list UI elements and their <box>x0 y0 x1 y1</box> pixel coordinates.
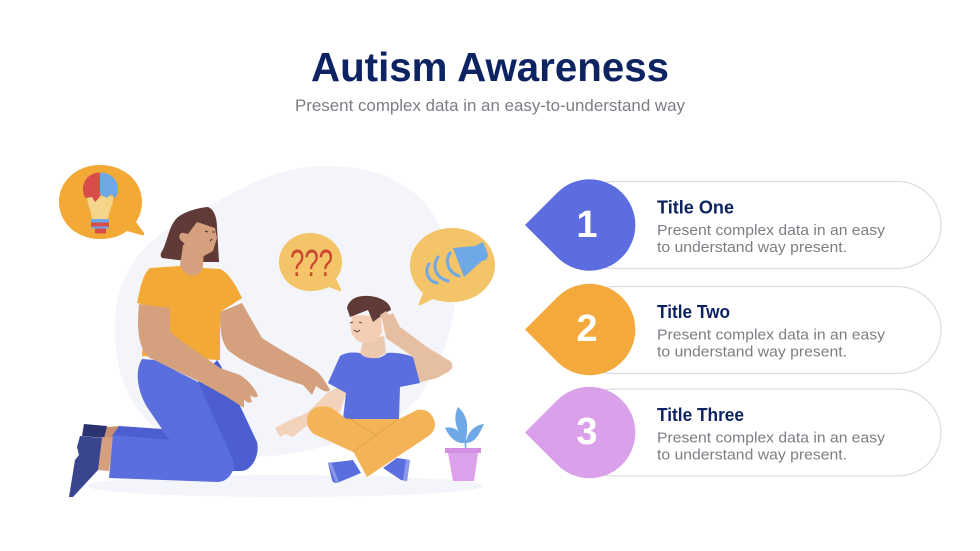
boy <box>275 296 452 483</box>
icon: puzzle left half <box>83 172 100 202</box>
icon: bulb base <box>91 219 109 234</box>
hair back <box>161 207 219 262</box>
icon: bulb glass <box>87 196 113 219</box>
description: Present complex data in an easy <box>657 223 886 239</box>
foot soles <box>328 460 410 483</box>
item 1 <box>525 179 941 271</box>
back sock <box>104 426 120 440</box>
hair <box>347 296 391 322</box>
pot body <box>448 453 478 481</box>
icon: speaker cone <box>453 246 483 277</box>
crossed legs <box>307 406 435 477</box>
description <box>657 430 886 464</box>
potted plant <box>445 407 484 481</box>
number: 1 <box>576 204 598 246</box>
left leaf <box>445 427 465 443</box>
number: 2 <box>576 308 598 350</box>
heading: Title Two <box>657 302 730 322</box>
front leg <box>109 359 234 482</box>
heading: Title One <box>657 198 734 218</box>
pot rim <box>445 448 481 453</box>
description <box>657 328 886 360</box>
description: to understand way present. <box>657 240 847 256</box>
back shin <box>112 426 171 441</box>
subtitle: Present complex data in an easy-to-understand way <box>295 97 686 115</box>
pill outline <box>570 182 941 268</box>
neck <box>360 336 386 360</box>
teardrop badge <box>525 387 635 478</box>
centre leaf <box>455 407 467 442</box>
item 2 <box>525 284 941 375</box>
description: Present complex data in an easy <box>657 328 886 344</box>
face <box>179 222 217 257</box>
pill outline <box>570 286 941 374</box>
number: 3 <box>576 411 598 453</box>
eyes and mouth <box>205 231 215 241</box>
icon: speaker back <box>475 242 488 261</box>
right arm <box>220 303 330 395</box>
icon: puzzle right half <box>100 172 118 198</box>
title: Autism Awareness <box>311 44 669 90</box>
background blob <box>115 166 454 456</box>
speech bubble: light bulb <box>59 165 144 239</box>
front shoe <box>69 436 102 497</box>
ground shadow <box>87 475 483 497</box>
left arm <box>138 304 258 408</box>
speech bubble: question marks <box>279 233 342 291</box>
facial features <box>350 322 362 332</box>
woman <box>69 207 330 497</box>
icon: sound waves <box>427 253 459 283</box>
neck <box>180 245 204 276</box>
speech bubble: speaker <box>410 228 495 305</box>
hand on head <box>380 311 398 331</box>
description: to understand way present. <box>657 344 847 360</box>
description: Present complex data in an easy <box>657 430 886 446</box>
item 3 <box>525 387 941 478</box>
illustration <box>59 165 495 497</box>
raised arm <box>382 313 452 383</box>
stem <box>464 425 466 449</box>
front sock <box>97 437 114 471</box>
left foot <box>328 460 361 483</box>
question marks: ??? <box>290 243 333 285</box>
shirt <box>137 266 242 360</box>
heading: Title Three <box>657 405 744 425</box>
description: to understand way present. <box>657 448 847 464</box>
right foot <box>383 458 410 481</box>
right leaf <box>466 424 484 443</box>
left arm <box>275 387 346 437</box>
back thigh <box>198 360 258 471</box>
pill outline <box>570 389 941 476</box>
teardrop badge <box>525 284 635 375</box>
description <box>657 223 886 256</box>
teardrop badge <box>525 179 635 271</box>
back shoe <box>82 424 107 438</box>
face <box>351 315 382 343</box>
shirt <box>328 352 420 419</box>
